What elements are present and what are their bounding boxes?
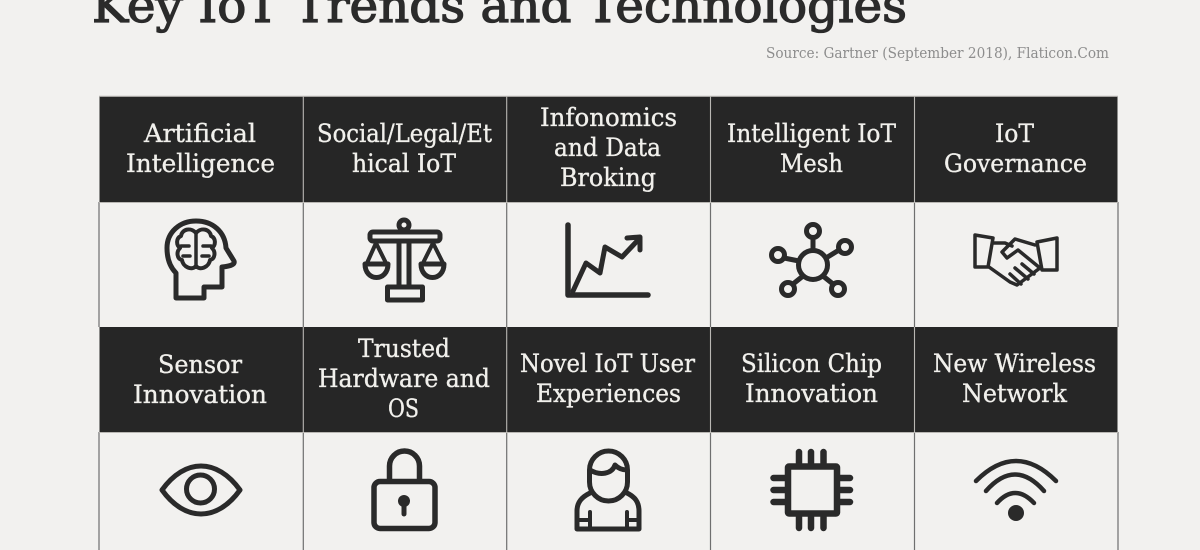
heading: Trusted Hardware and OS: Hardware and <box>318 364 490 393</box>
heading: Novel IoT User Experiences: Novel IoT User <box>520 349 695 378</box>
icon: user <box>577 451 639 529</box>
icon: scales of justice <box>365 220 444 300</box>
heading: IoT Governance: IoT <box>995 119 1034 148</box>
icon: eye <box>162 466 240 514</box>
heading: New Wireless Network: New Wireless <box>933 349 1096 378</box>
icon: microchip <box>774 452 850 528</box>
heading: Social/Legal/Ethical IoT: hical IoT <box>352 149 456 178</box>
icon: padlock <box>374 451 435 528</box>
heading: Intelligent IoT Mesh <box>727 119 896 178</box>
heading: New Wireless Network: Network <box>962 379 1068 408</box>
heading: Novel IoT User Experiences: Experiences <box>536 379 681 408</box>
heading: Intelligent IoT Mesh: Mesh <box>780 149 843 178</box>
header row 2 background <box>99 327 1118 432</box>
heading: Intelligent IoT Mesh: Intelligent IoT <box>727 119 896 148</box>
heading: Infonomics and Data Broking: Broking <box>560 163 656 192</box>
heading: Infonomics and Data Broking <box>540 103 677 192</box>
icon: wifi <box>976 461 1056 521</box>
heading: Novel IoT User Experiences <box>520 349 695 408</box>
icon: mesh network <box>772 224 852 296</box>
heading: Trusted Hardware and OS <box>318 334 490 423</box>
heading: Silicon Chip Innovation: Innovation <box>745 379 878 408</box>
icon: handshake <box>975 235 1057 285</box>
heading: Social/Legal/Ethical IoT <box>317 119 492 178</box>
icon: rising line chart <box>568 225 648 295</box>
heading: Trusted Hardware and OS: Trusted <box>358 334 450 363</box>
heading: Sensor Innovation: Sensor <box>158 350 242 379</box>
header row 1 background <box>99 96 1118 202</box>
heading: IoT Governance: Governance <box>944 149 1087 178</box>
heading: Silicon Chip Innovation <box>741 349 882 408</box>
heading: Infonomics and Data Broking: and Data <box>554 133 661 162</box>
heading: Social/Legal/Ethical IoT: Social/Legal/Et <box>317 119 492 148</box>
icon: brain in head <box>167 221 234 298</box>
body cell grid lines <box>99 202 1118 550</box>
heading: New Wireless Network <box>933 349 1096 408</box>
heading: Sensor Innovation: Innovation <box>133 380 267 409</box>
source note: Source: Gartner (September 2018), Flaticon.Com <box>766 44 1109 62</box>
heading: Trusted Hardware and OS: OS <box>388 394 419 423</box>
heading: Sensor Innovation <box>133 350 267 409</box>
heading: Artificial Intelligence: Intelligence <box>126 149 275 178</box>
heading: Silicon Chip Innovation: Silicon Chip <box>741 349 882 378</box>
heading: Artificial Intelligence: Artificial <box>143 119 256 148</box>
heading: IoT Governance <box>944 119 1087 178</box>
heading: Artificial Intelligence <box>126 119 275 178</box>
heading: Infonomics and Data Broking: Infonomics <box>540 103 677 132</box>
